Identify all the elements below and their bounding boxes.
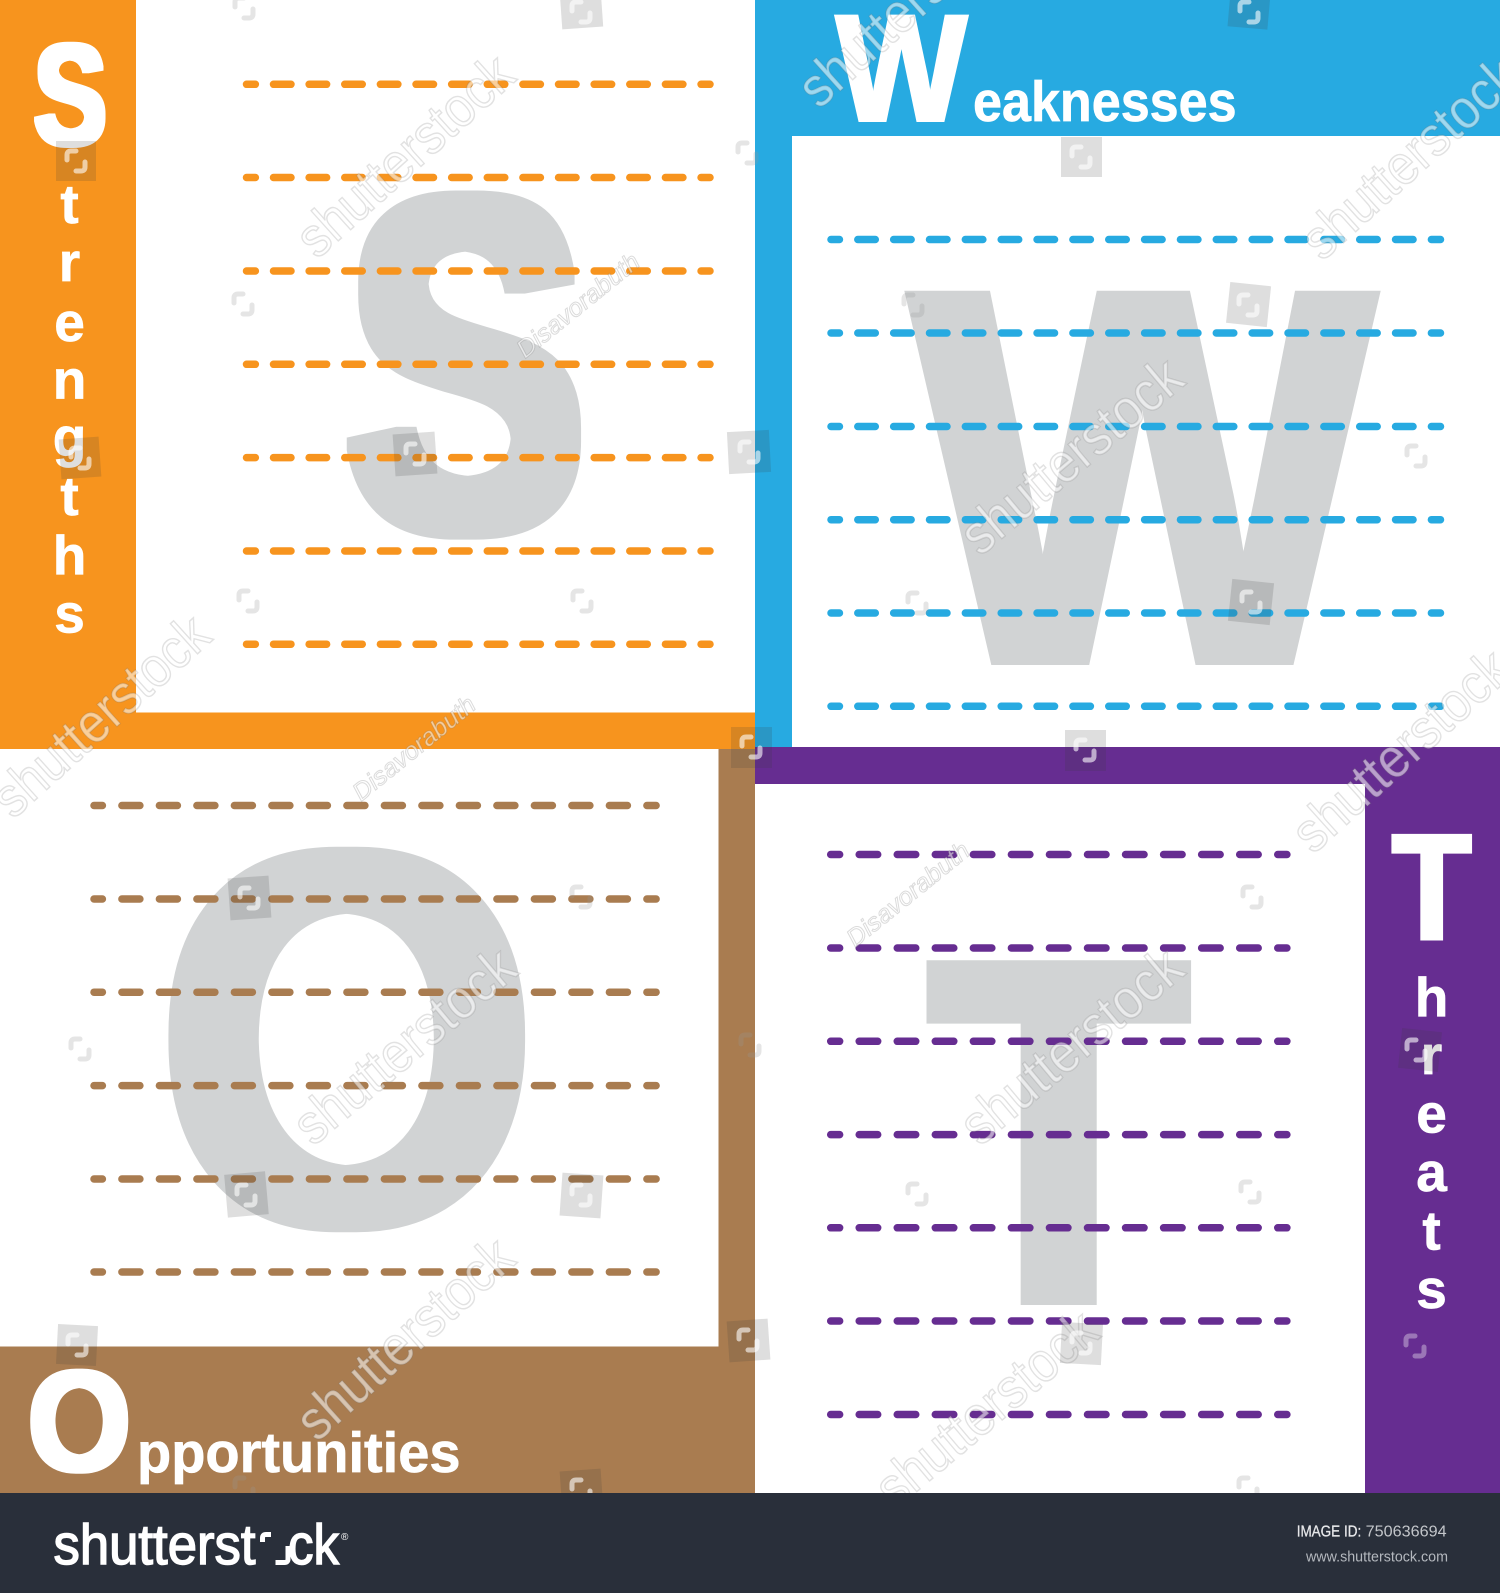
panel: threats — [755, 747, 1500, 1493]
heading: Opportunities: O — [28, 1342, 131, 1502]
footer bar — [0, 1493, 1500, 1593]
watermark overlay: shutterstock — [862, 1297, 1110, 1519]
image id number: 750636694 — [1366, 1524, 1447, 1541]
heading: Strengths: g — [53, 406, 86, 468]
watermark overlay: Disavorabuth — [511, 248, 645, 364]
dashed lines: weaknesses — [831, 240, 1440, 706]
heading: Threats: t — [1422, 1199, 1441, 1261]
watermark overlay: Disavorabuth — [347, 691, 481, 807]
heading: Strengths: t — [60, 465, 79, 527]
panel: weaknesses — [755, 0, 1500, 780]
dashed lines: opportunities — [94, 806, 656, 1272]
heading: Strengths: t — [60, 173, 79, 235]
watermark overlay: shutterstock — [283, 41, 526, 269]
watermark overlay: Disavorabuth — [841, 837, 975, 953]
heading: Strengths: n — [53, 348, 86, 410]
big letter W: W — [911, 173, 1379, 780]
heading: Threats: e — [1416, 1083, 1447, 1145]
website url: www.shutterstock.com — [1305, 1549, 1448, 1566]
heading: Strengths: e — [54, 291, 85, 353]
heading: Weaknesses: eaknesses — [973, 70, 1237, 134]
heading: Strengths: h — [53, 524, 86, 586]
heading: Strengths — [34, 15, 107, 645]
dashed lines: strengths — [246, 84, 710, 644]
panel: opportunities — [0, 739, 755, 1502]
big letter T: T — [929, 858, 1188, 1404]
heading: Opportunities — [28, 1342, 461, 1502]
panel: strengths — [0, 0, 755, 749]
watermark overlay: shutterstock — [280, 934, 528, 1156]
big letter O: O — [159, 739, 535, 1338]
heading: Strengths: s — [54, 583, 85, 645]
logo: shutterstock: ® — [341, 1532, 349, 1543]
heading: Threats: a — [1416, 1141, 1447, 1203]
heading: Threats — [1392, 803, 1471, 1320]
heading: Weaknesses — [836, 0, 1237, 156]
heading: Opportunities: pportunities — [137, 1421, 460, 1485]
image id: IMAGE ID: — [1297, 1524, 1361, 1541]
heading: Threats: r — [1421, 1024, 1442, 1086]
heading: Threats: h — [1415, 966, 1448, 1028]
heading: Threats: T — [1392, 803, 1471, 971]
dashed lines: threats — [831, 854, 1287, 1414]
heading: Threats: s — [1416, 1258, 1447, 1320]
watermark overlay: shutterstock — [947, 934, 1195, 1156]
logo: shutterstock: ck — [288, 1513, 339, 1577]
watermark overlay: shutterstock — [283, 1224, 526, 1452]
heading: Strengths: S — [34, 15, 107, 176]
big letter S: S — [346, 99, 585, 631]
logo: shutterstock: shutterst — [54, 1513, 256, 1577]
heading: Strengths: r — [59, 231, 80, 293]
watermark overlay: shutterstock — [947, 344, 1195, 566]
